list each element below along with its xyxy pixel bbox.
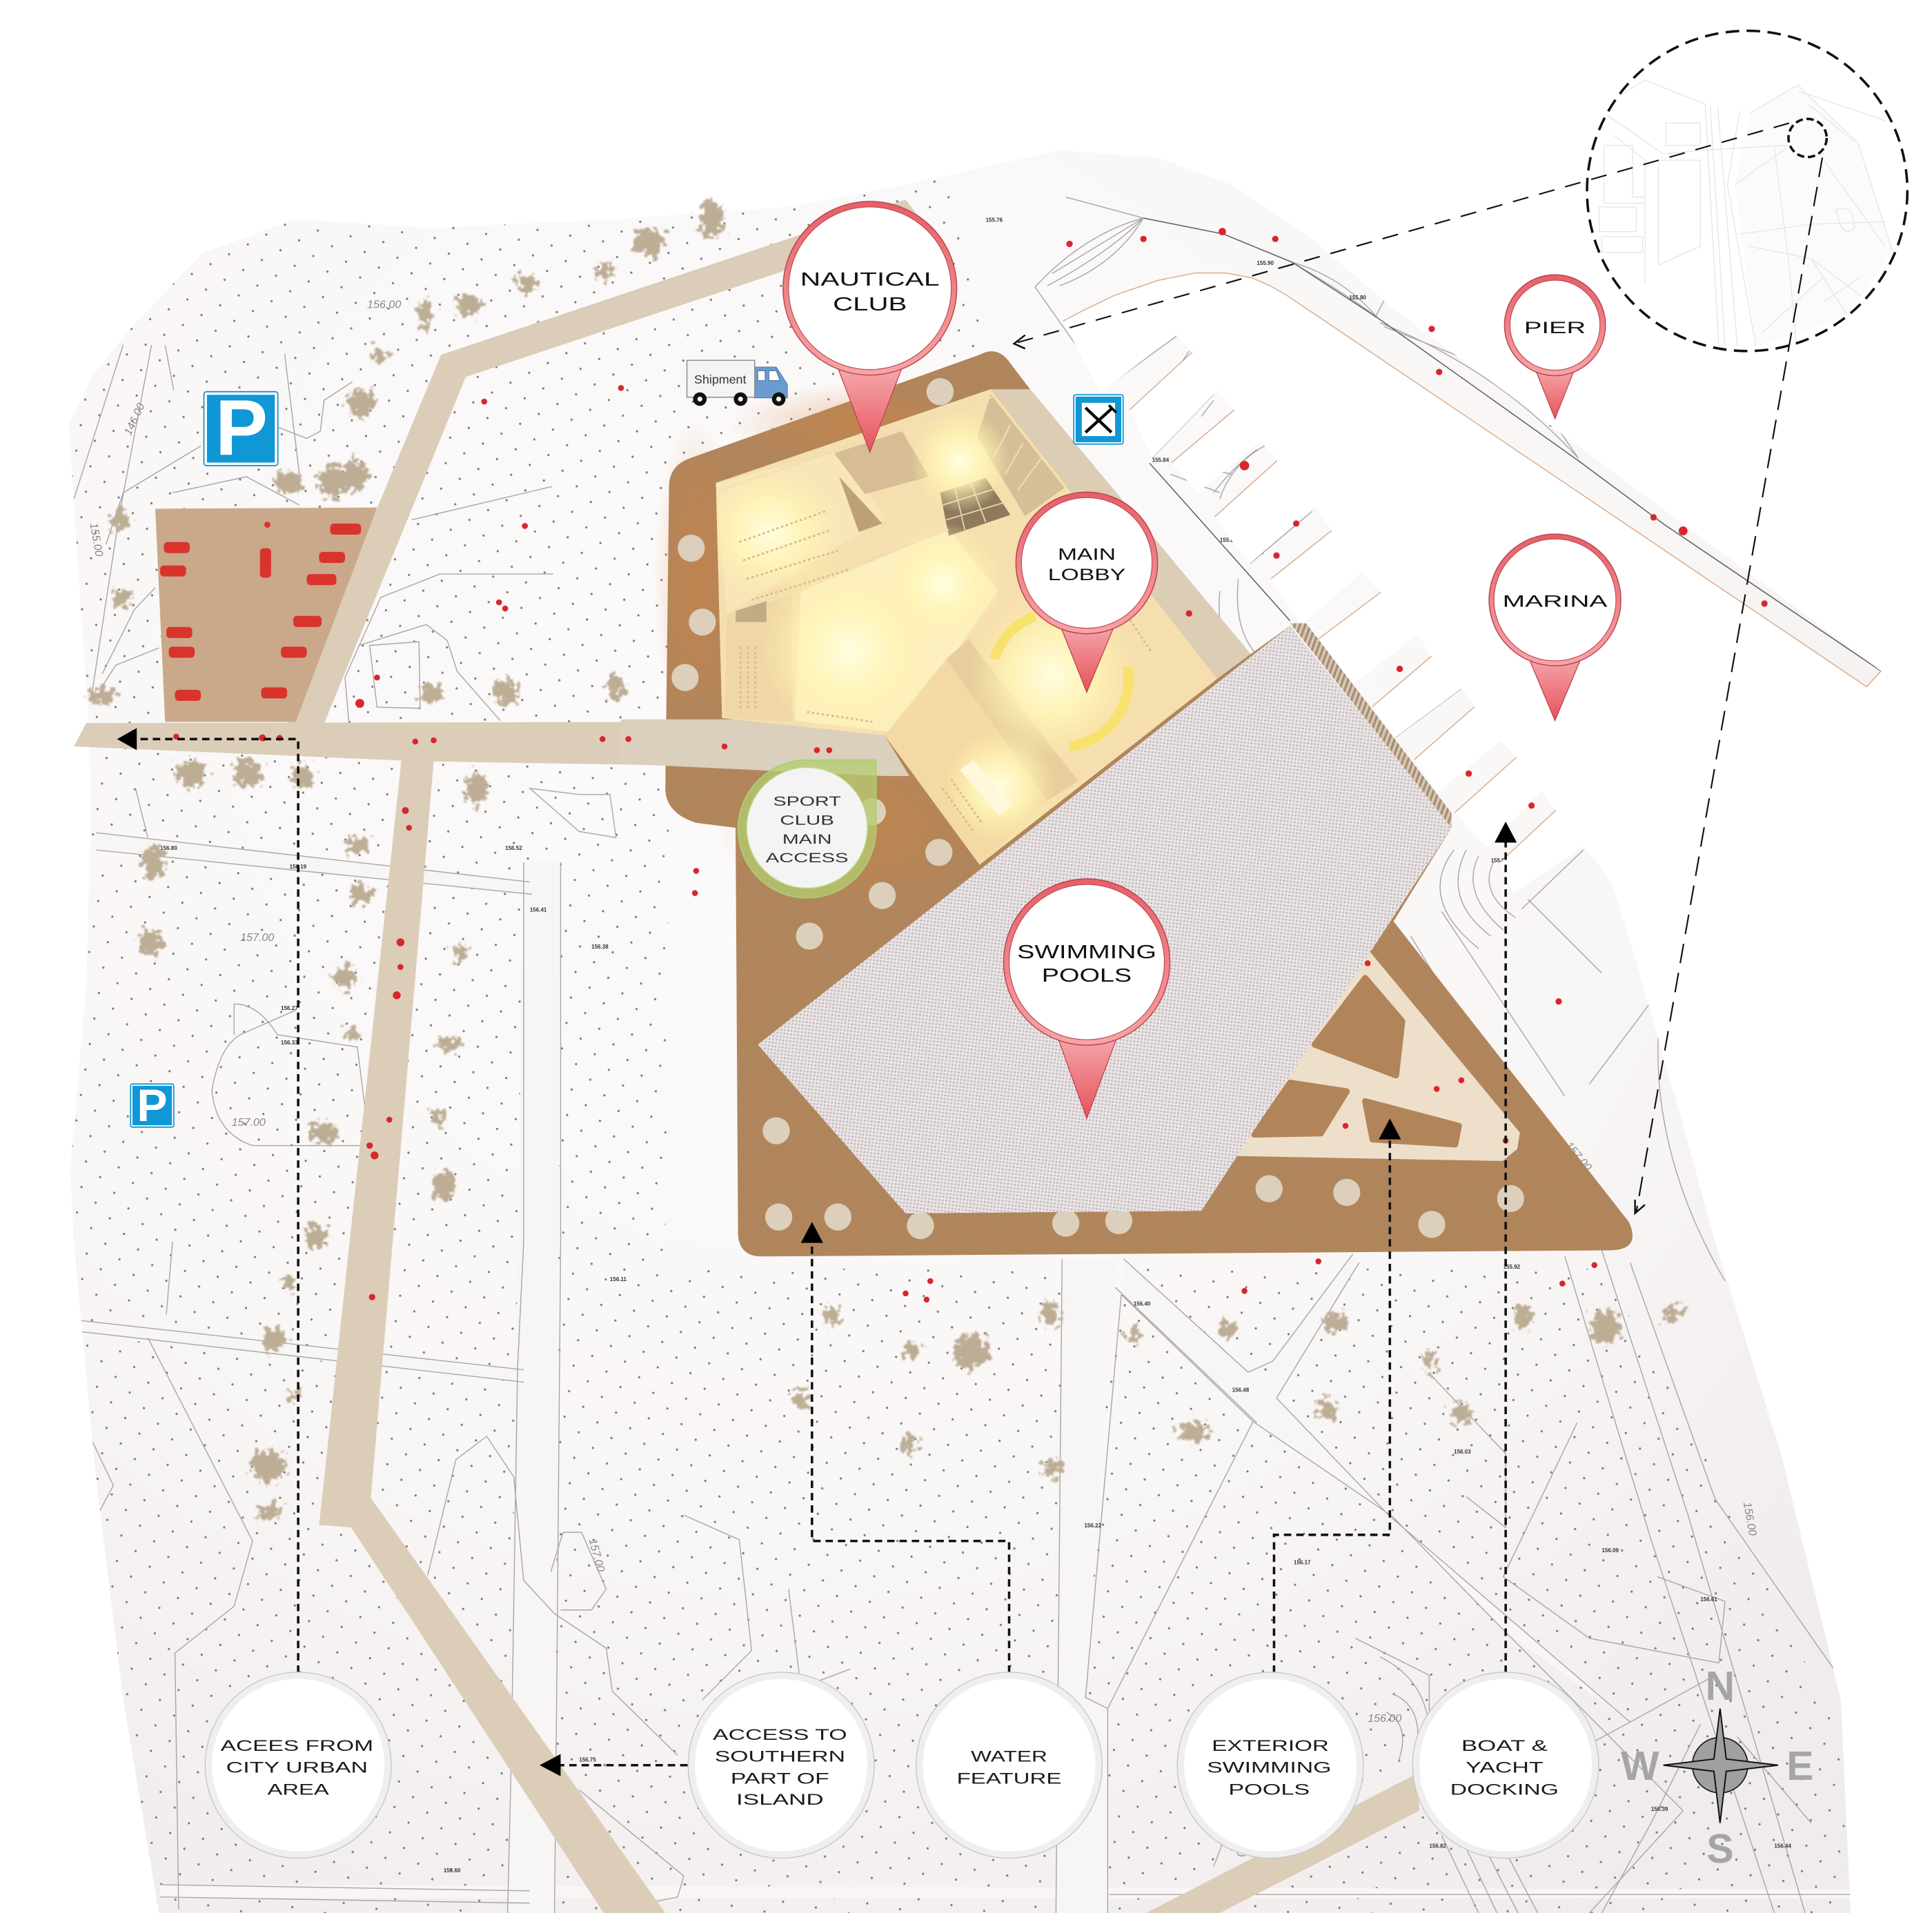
callout: sport club main access: CLUB [780,813,834,828]
beige service strip [991,389,1250,679]
callout: sport club main access: MAIN [782,832,831,847]
survey labels: 156.48 [1232,1387,1250,1394]
icon: shipment truck: Shipment [694,373,746,386]
survey labels: 156.33 [281,1040,298,1046]
parking lot with cars [155,508,377,722]
leader arrow: locator to site [1014,123,1789,348]
bubble: exterior pools: POOLS [1228,1781,1310,1798]
survey labels [87,217,1791,1874]
icon: shipment truck [687,360,787,406]
survey labels: 156.19 [290,864,307,870]
survey labels: 156.52 [505,845,522,851]
pin: pier: PIER [1524,319,1586,337]
survey labels: 156.38 [591,944,609,950]
arrow: southern access [540,1754,687,1776]
road across terrace [621,720,909,776]
road network [74,199,1419,1913]
bubble: city urban access [205,1672,391,1859]
leader arrow: locator to terrace [1635,158,1822,1213]
survey labels: 156.00 [1741,1501,1759,1537]
survey labels: 155.90 [1256,260,1274,266]
glowing building model [696,389,1217,864]
location minimap [1587,31,1907,351]
survey labels: 156.82 [1429,1843,1446,1849]
compass rose: W [1621,1744,1659,1789]
cork terrace [653,351,1633,1256]
bubble: city urban access: AREA [268,1781,329,1798]
survey labels: 156.00 [367,298,401,310]
bubble: southern access: ACCESS TO [713,1726,847,1743]
survey labels: 156.09 [1601,1547,1619,1554]
survey labels: 156.44 [1774,1843,1791,1849]
pin: swimming pools: SWIMMING [1017,941,1156,962]
compass rose: N [1706,1664,1735,1709]
arrow: exterior pools [1274,1118,1401,1673]
survey labels: 155.80 [1349,295,1366,301]
pin: nautical club: NAUTICAL [800,268,940,290]
survey labels: 157.00 [1563,1140,1594,1173]
survey labels: 155.92 [1504,1264,1521,1270]
survey labels: 156.00 [1368,1712,1401,1725]
pin: nautical club [783,201,957,452]
survey labels: 155.76 [986,217,1003,223]
bubble: city urban access: CITY URBAN [226,1758,368,1776]
red site markers [173,228,1768,1302]
swimming pool deck [758,624,1452,1213]
bubble: southern access: ISLAND [736,1791,824,1808]
callout: sport club main access: SPORT [773,794,841,809]
compass rose: E [1786,1744,1814,1789]
bubble: boat and yacht docking: YACHT [1466,1758,1544,1776]
bubble: city urban access: ACEES FROM [221,1737,373,1754]
survey labels: 156.22 [1084,1523,1101,1529]
pin: main lobby [1016,492,1158,692]
icon: parking sign small: P [137,1080,168,1131]
bubble: southern access: PART OF [731,1770,829,1787]
survey labels: 157.00 [586,1537,607,1574]
survey labels: 155.70 [1549,422,1566,428]
bubble: southern access: SOUTHERN [715,1747,845,1765]
survey labels: 156.60 [444,1867,461,1874]
survey labels: 155.95 [1491,858,1508,864]
icon: restaurant sign [1074,395,1123,444]
survey labels: 155.84 [1152,457,1170,464]
bubble: exterior pools [1177,1672,1363,1859]
survey labels: 156.03 [1454,1449,1471,1455]
pin: marina [1489,534,1621,721]
survey labels: 156.11 [610,1276,627,1282]
survey labels: 155.97 [1392,975,1410,981]
bubble: water feature: FEATURE [957,1770,1061,1787]
icon: parking sign large: P [215,384,268,472]
trees [88,201,1683,1520]
survey labels: 156.61 [1700,1596,1717,1603]
bubble: boat and yacht docking: DOCKING [1450,1781,1559,1798]
compass rose: S [1706,1827,1734,1872]
survey labels: 156.39 [1651,1806,1668,1812]
survey labels: 157.00 [1232,1822,1248,1857]
survey labels: 156.40 [1134,1301,1151,1307]
pin: main lobby: LOBBY [1048,566,1125,584]
bubble: boat and yacht docking: BOAT & [1461,1737,1548,1754]
pin: swimming pools: POOLS [1042,964,1132,986]
callout: sport club main access [738,760,876,898]
bubble: water feature: WATER [971,1747,1047,1765]
arrow: city urban access [117,728,298,1673]
compass rose [1621,1664,1814,1872]
bubble: boat and yacht docking [1412,1672,1599,1859]
pin: marina: MARINA [1503,592,1608,611]
garden paths [1237,953,1518,1159]
pin: swimming pools [1003,879,1170,1118]
survey labels: 157.00 [232,1116,266,1129]
arrow: boat docking [1495,822,1517,1673]
pin: nautical club: CLUB [833,293,907,315]
survey labels: 155.00 [87,522,106,557]
survey labels: 157.00 [240,931,274,944]
survey labels: 156.41 [530,906,547,913]
survey labels: 146.00 [122,402,148,437]
arrow: water feature [801,1222,1009,1673]
survey labels: 156.75 [579,1756,596,1763]
survey labels: 156.80 [160,845,177,851]
survey labels: 156.12 [320,1769,337,1775]
survey labels: 156.17 [1294,1560,1311,1566]
survey labels: 156.27 [281,1005,298,1011]
bubble: exterior pools: SWIMMING [1207,1758,1331,1776]
pin: pier [1504,275,1606,419]
bubble: southern access [688,1672,874,1859]
pin: main lobby: MAIN [1058,546,1116,564]
bubble: exterior pools: EXTERIOR [1212,1737,1329,1754]
bubble: water feature [916,1672,1102,1859]
survey labels: 155.88 [1220,537,1237,544]
callout: sport club main access: ACCESS [766,851,848,866]
